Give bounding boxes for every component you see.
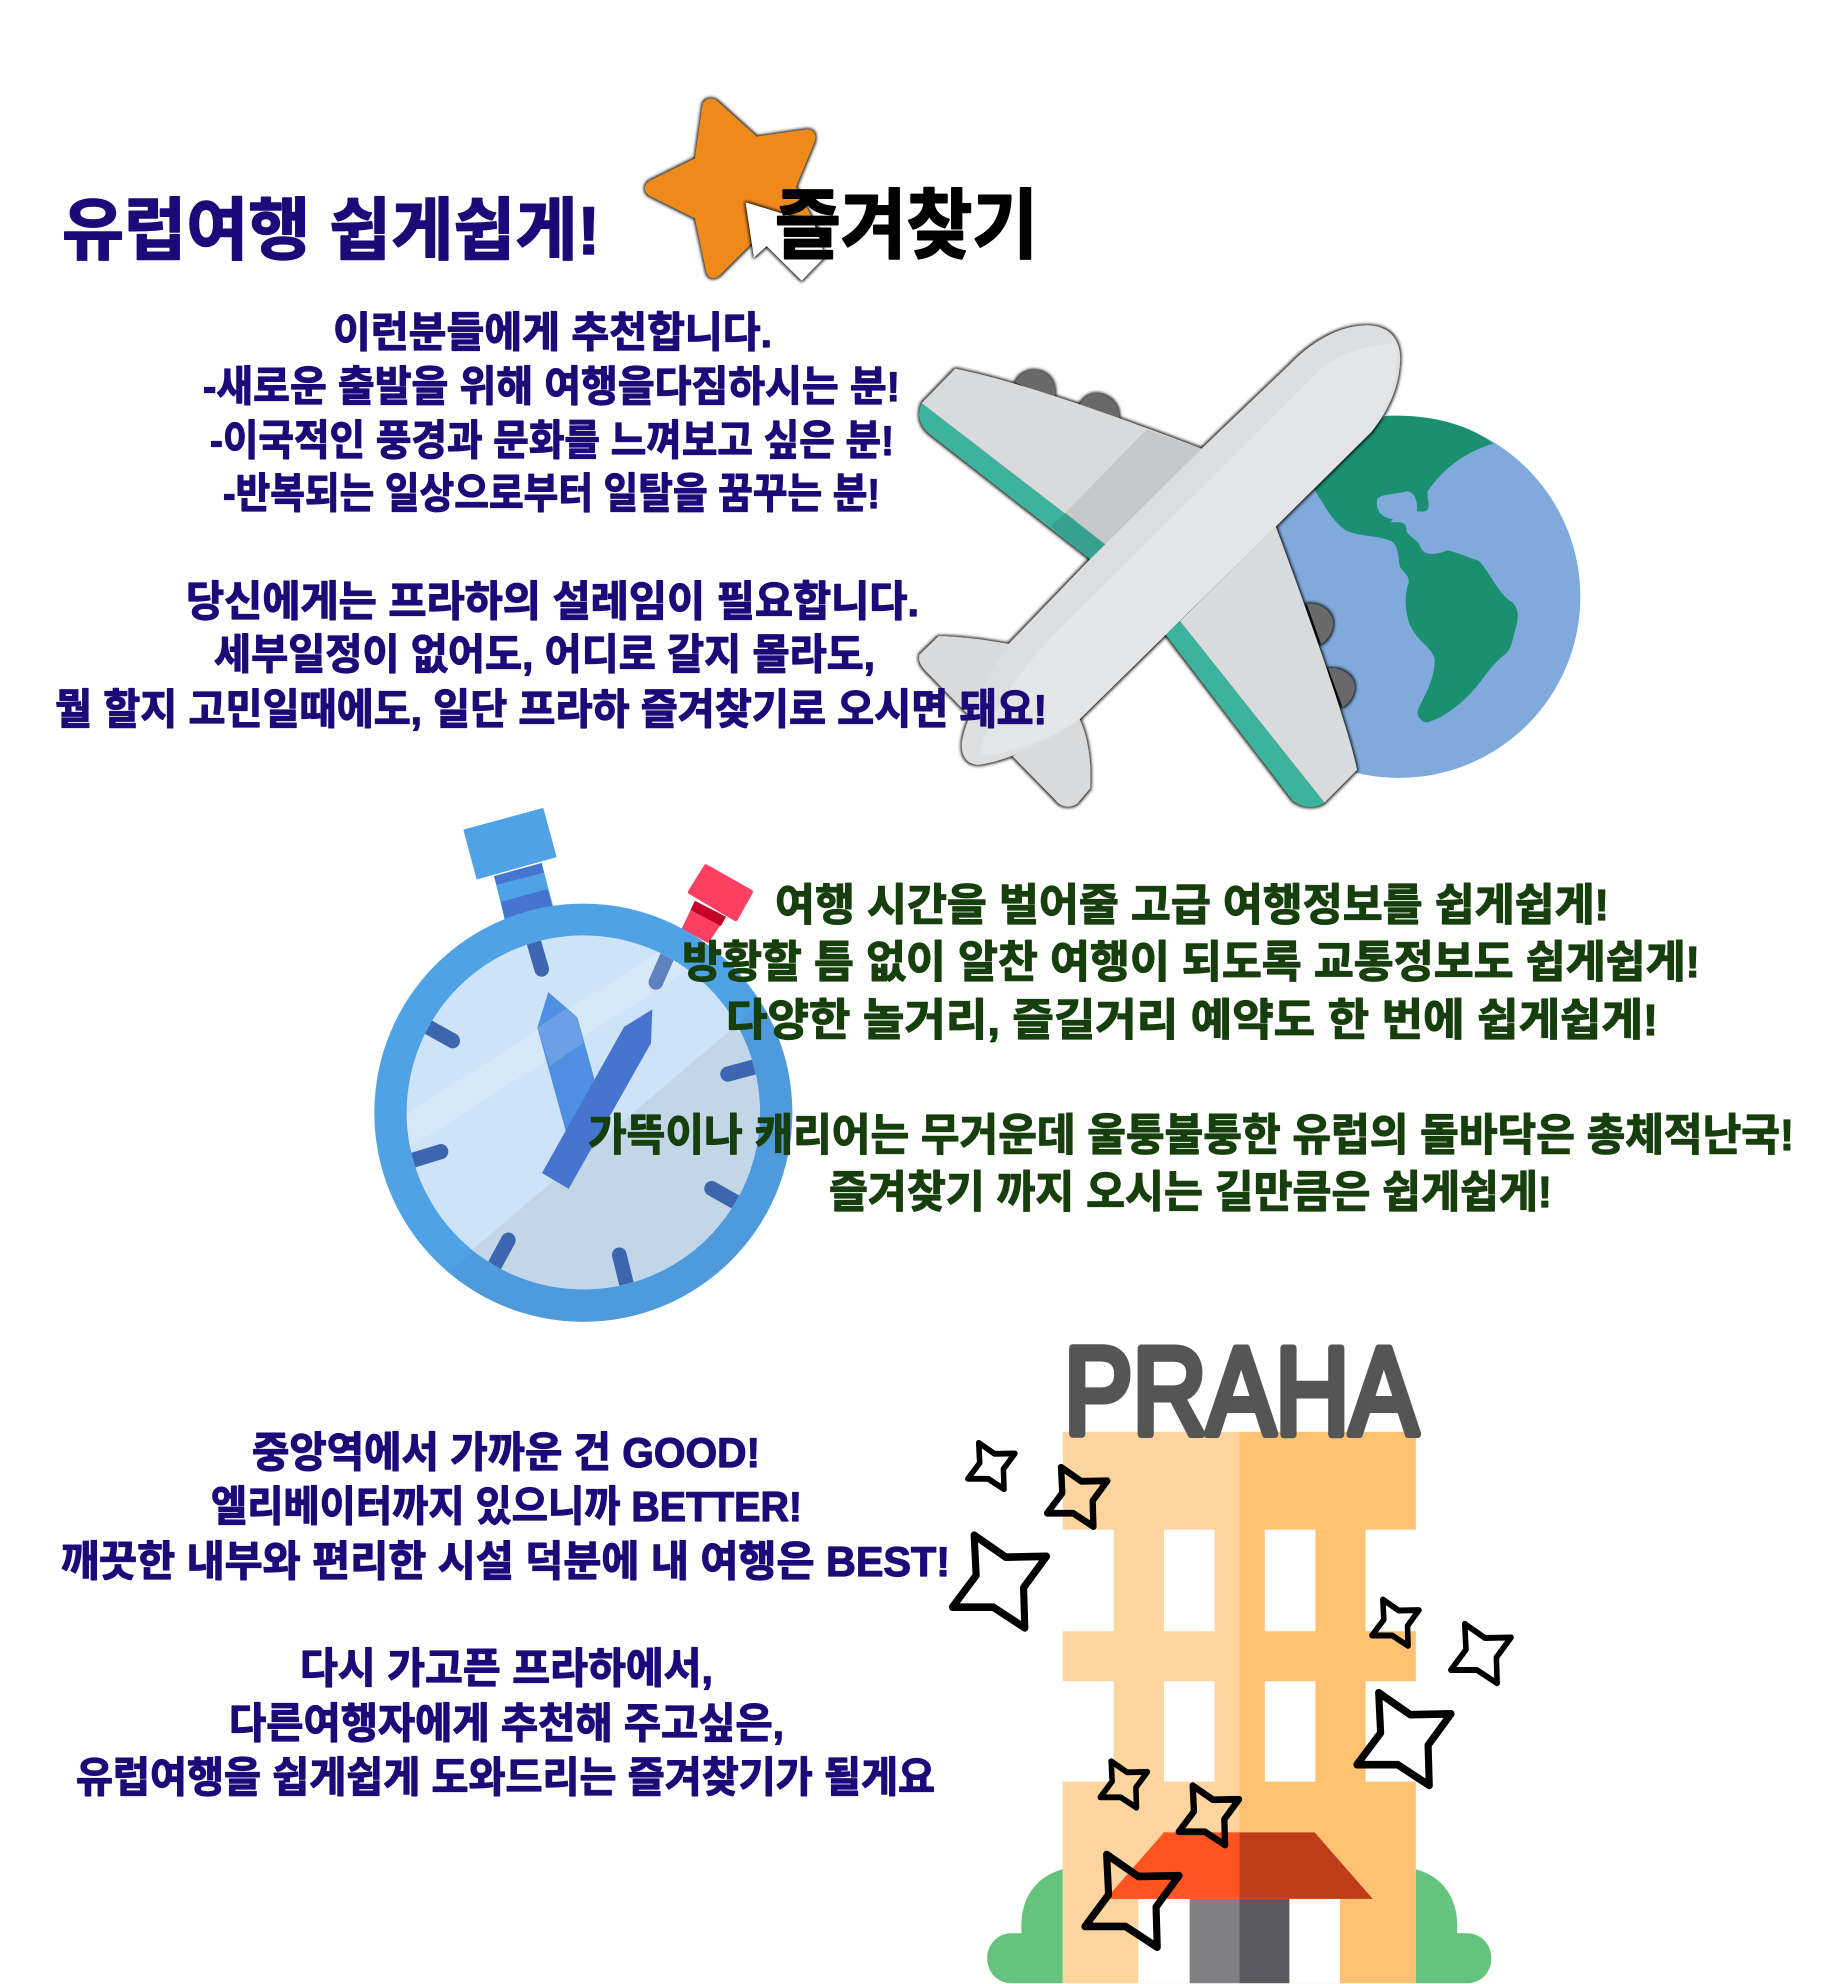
text block: who it is for: -이국적인 풍경과 문화를 느껴보고 싶은 분! (210, 417, 894, 464)
illustration: stopwatch (374, 808, 792, 1322)
illustration: airplane (919, 325, 1400, 807)
fuselage (962, 325, 1400, 765)
text block: who it is for: -반복되는 일상으로부터 일탈을 꿈꾸는 분! (223, 470, 880, 517)
text block: location and facilities: 중앙역에서 가까운 건 GOOD! (252, 1429, 760, 1476)
star (645, 98, 819, 278)
text block: who it is for: 당신에게는 프라하의 설레임이 필요합니다. (186, 578, 919, 625)
text block: location and facilities: 깨끗한 내부와 편리한 시설 덕분에 내 여행은 BEST! (61, 1538, 950, 1585)
tail fins (919, 636, 1090, 807)
illustration: globe (1218, 416, 1580, 778)
brand name: 즐겨찾기 (775, 184, 1038, 269)
upper wing engines (1015, 370, 1119, 420)
text block: who it is for (55, 309, 1047, 733)
building sign: PRAHA: PRAHA (1064, 1323, 1418, 1461)
text block: location and facilities: 다른여행자에게 추천해 주고싶은, (229, 1700, 784, 1747)
building body (1063, 1432, 1416, 1983)
text block: easy travel information: 방황할 틈 없이 알찬 여행이 되도록 교통정보도 쉽게쉽게! (682, 938, 1700, 987)
lower wing engines (1307, 603, 1355, 707)
text block: location and facilities: 엘리베이터까지 있으니까 BETTER! (211, 1483, 802, 1530)
text block: easy travel information (588, 881, 1794, 1217)
text block: who it is for: 이런분들에게 추천합니다. (333, 309, 772, 356)
text block: who it is for: -새로운 출발을 위해 여행을다짐하시는 분! (203, 363, 900, 410)
sparkles (952, 1443, 1511, 1947)
text block: easy travel information: 가뜩이나 캐리어는 무거운데 울퉁불퉁한 유럽의 돌바닥은 총체적난국! (588, 1111, 1794, 1160)
upper wing (919, 369, 1202, 560)
watch rim (374, 904, 792, 1322)
tick marks (405, 935, 763, 1291)
entrance door (1138, 1899, 1340, 1983)
windows (1060, 1530, 1418, 1782)
icon: favourite star with cursor (645, 98, 825, 281)
text block: easy travel information: 여행 시간을 벌어줄 고급 여행정보를 쉽게쉽게! (775, 881, 1609, 930)
watch face (406, 935, 760, 1290)
crown (463, 808, 557, 921)
trees (987, 1869, 1491, 1983)
reset button (682, 867, 751, 943)
watch hands (537, 992, 652, 1189)
text block: who it is for: 세부일정이 없어도, 어디로 갈지 몰라도, (214, 631, 875, 678)
lower wing (1166, 526, 1357, 807)
text block: location and facilities: 다시 가고픈 프라하에서, (300, 1645, 713, 1692)
title: 유럽여행 쉽게쉽게! (62, 193, 600, 269)
text block: location and facilities: 유럽여행을 쉽게쉽게 도와드리는 즐겨찾기가 될게요 (76, 1754, 935, 1801)
globe continents (1314, 416, 1518, 722)
text block: easy travel information: 즐겨찾기 까지 오시는 길만큼은 쉽게쉽게! (829, 1168, 1552, 1217)
awning (1106, 1832, 1373, 1899)
cursor arrow (746, 202, 825, 281)
text block: who it is for: 뭘 할지 고민일때에도, 일단 프라하 즐겨찾기로 오시면 돼요! (55, 686, 1047, 733)
illustration: hotel building (952, 1432, 1511, 1983)
text block: location and facilities (61, 1429, 950, 1801)
text block: easy travel information: 다양한 놀거리, 즐길거리 예약도 한 번에 쉽게쉽게! (726, 996, 1658, 1045)
